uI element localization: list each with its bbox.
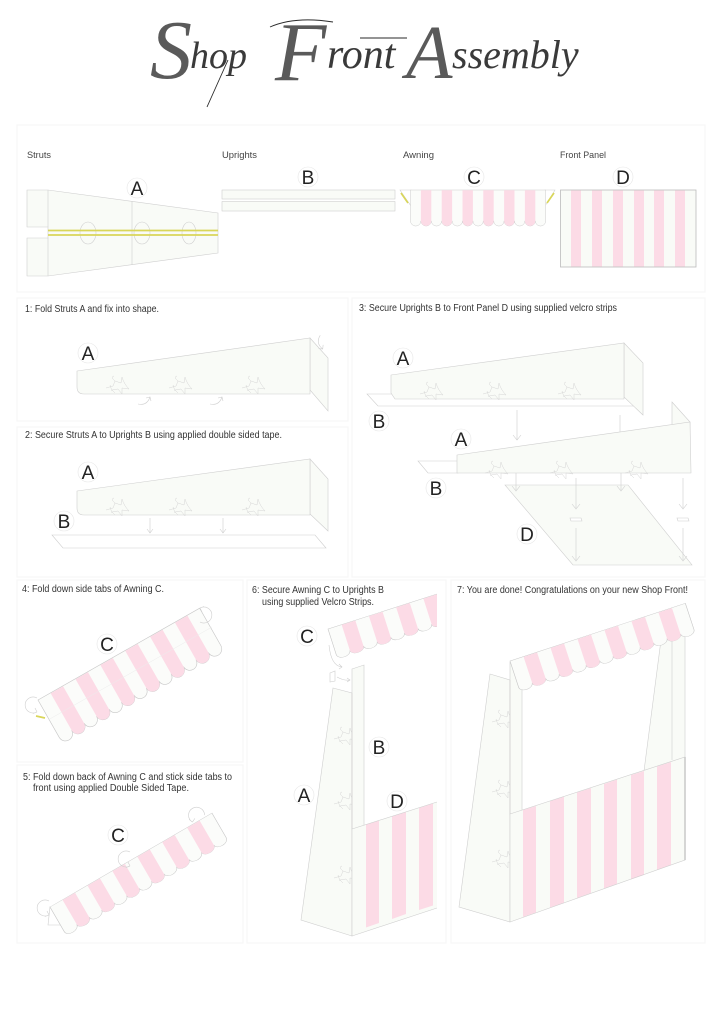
- badge A: [294, 785, 314, 807]
- part B: flat uprights: [222, 190, 395, 211]
- step 5 text: [23, 772, 233, 794]
- badge A upper: [393, 348, 413, 370]
- upright B plank: [52, 535, 326, 548]
- panel: step 5: [17, 765, 243, 943]
- step 5 text: 5: Fold down back of Awning C and stick side tabs to: [23, 772, 233, 783]
- panel: step 7: [451, 580, 705, 943]
- badge A: A: [298, 786, 311, 807]
- panel: step 2: [17, 427, 348, 577]
- finished strut: [459, 674, 515, 922]
- upright B: [352, 665, 364, 830]
- badge B: B: [373, 738, 385, 759]
- folded strut: [77, 338, 328, 411]
- right upright and strut: [644, 632, 685, 771]
- label: awning: Awning: [403, 150, 434, 160]
- badge B: [54, 511, 74, 533]
- badge C: [297, 626, 317, 648]
- folded awning: [48, 813, 229, 936]
- label: uprights: Uprights: [222, 150, 257, 160]
- badge A: A: [131, 179, 144, 200]
- badge A: [78, 343, 98, 365]
- long down arrow: [513, 410, 620, 440]
- step 1 text: 1: Fold Struts A and fix into shape.: [25, 304, 159, 315]
- title: hop: [190, 35, 256, 77]
- upper strut with upright: [367, 343, 643, 415]
- badge C: C: [300, 627, 314, 648]
- part C: flat awning: [400, 190, 555, 226]
- fold arrows: [37, 804, 205, 916]
- badge D: D: [616, 168, 630, 189]
- down arrows: [147, 518, 226, 533]
- step 7 text: 7: You are done! Congratulations on your new Shop Front!: [457, 585, 688, 596]
- badge B upper: [369, 411, 389, 433]
- step 4 text: 4: Fold down side tabs of Awning C.: [22, 584, 164, 595]
- badge B: B: [302, 168, 314, 189]
- badge C: [108, 825, 128, 847]
- title: A: [401, 11, 453, 95]
- label: struts: Struts: [27, 150, 51, 160]
- badge A lower: [451, 429, 471, 451]
- panel: step 6: [247, 572, 515, 943]
- title: [150, 4, 579, 107]
- velcro and arrows: [329, 645, 350, 682]
- lower strut with upright: [418, 402, 691, 479]
- panel: parts overview: [17, 125, 705, 292]
- badge B: [369, 737, 389, 759]
- part A: flat struts: [27, 190, 218, 276]
- title: ront: [327, 32, 406, 78]
- step 6 text: [252, 585, 384, 608]
- title: S: [150, 4, 192, 97]
- front panel D: [505, 485, 692, 565]
- badge A: [127, 178, 147, 200]
- part D: flat front panel: [560, 190, 696, 267]
- badge C: [97, 634, 117, 656]
- badge B lower: B: [430, 479, 442, 500]
- awning with tabs: [36, 608, 224, 744]
- panel: step 4: [17, 580, 243, 762]
- panel: step 1: [17, 298, 348, 421]
- badge B: B: [58, 512, 70, 533]
- badge A: A: [82, 463, 95, 484]
- fold arrows: [25, 606, 212, 714]
- badge D: [517, 524, 537, 546]
- badge D: [387, 791, 407, 813]
- step 3 text: 3: Secure Uprights B to Front Panel D using supplied velcro strips: [359, 303, 617, 314]
- badge A lower: A: [455, 430, 468, 451]
- strut A: [301, 688, 357, 936]
- step 2 text: 2: Secure Struts A to Uprights B using applied double sided tape.: [25, 430, 282, 441]
- badge C: C: [100, 635, 114, 656]
- step 6 text: 6: Secure Awning C to Uprights B: [252, 585, 384, 596]
- badge B upper: B: [373, 412, 385, 433]
- title: ssembly: [452, 32, 579, 77]
- velcro strips and arrows: [512, 473, 689, 561]
- badge A: A: [82, 344, 95, 365]
- front panel D: [352, 693, 437, 936]
- step 5 text: front using applied Double Sided Tape.: [33, 783, 189, 794]
- badge B: [298, 167, 318, 189]
- strut: [77, 459, 328, 531]
- badge C: [464, 167, 484, 189]
- badge D: [613, 167, 633, 189]
- badge A upper: A: [397, 349, 410, 370]
- badge C: C: [467, 168, 481, 189]
- left upright: [510, 662, 522, 815]
- title: F: [274, 6, 328, 99]
- fold arrows: [138, 335, 327, 404]
- step 6 text: using supplied Velcro Strips.: [262, 597, 374, 608]
- badge A: [78, 462, 98, 484]
- lower front panel: [510, 680, 685, 922]
- badge D: D: [390, 792, 404, 813]
- awning C: [328, 594, 437, 658]
- label: front panel: Front Panel: [560, 150, 606, 160]
- badge B lower: [426, 478, 446, 500]
- badge C: C: [111, 826, 125, 847]
- badge D: D: [520, 525, 534, 546]
- panel: step 3: [352, 298, 705, 577]
- awning: [510, 603, 695, 692]
